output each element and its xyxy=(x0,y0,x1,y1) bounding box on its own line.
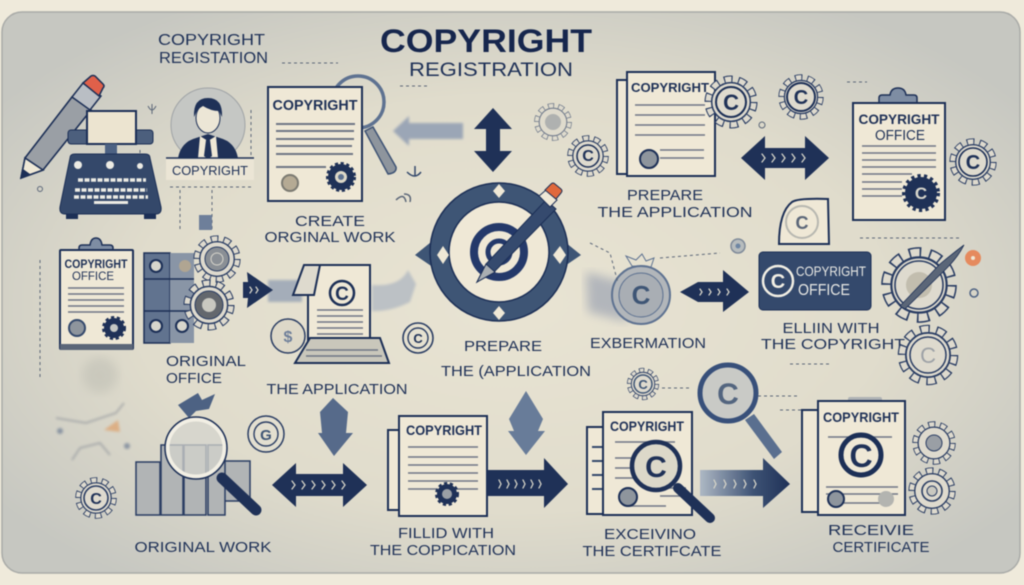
caption: filled with: FILLID WITH xyxy=(398,525,494,542)
clipboard: copyright office left: OFFICE xyxy=(72,269,114,283)
icon: gear with pen xyxy=(890,245,964,314)
caption: receive certificate: CERTIFICATE xyxy=(832,539,930,556)
caption: filled with: THE COPPICATION xyxy=(370,542,516,559)
icon: magnifier on certificate: C xyxy=(645,451,667,484)
arrow: gradient to certificate xyxy=(700,458,790,508)
arrow: double dark lower xyxy=(272,463,367,507)
caption: prepare the application xyxy=(598,187,752,221)
document: examining certificate: COPYRIGHT xyxy=(610,418,684,434)
icon: gear copyright 2: C xyxy=(794,87,808,109)
caption: filled with xyxy=(370,525,516,559)
caption: center prepare: THE (APPLICATION xyxy=(441,363,591,380)
icon: gear copyright 1: C xyxy=(723,90,739,115)
top-left heading xyxy=(158,32,268,67)
icon: application scroll xyxy=(293,265,389,363)
sign: copyright office: COPYRIGHT xyxy=(796,263,866,279)
caption: center prepare xyxy=(441,338,591,380)
arrow: double dark xyxy=(741,136,829,180)
sign: copyright office xyxy=(759,252,871,310)
icon: pale gear xyxy=(538,107,568,137)
icon: coin: $ xyxy=(284,329,293,346)
document: filled with application: COPYRIGHT xyxy=(406,422,482,438)
document: create original work: COPYRIGHT xyxy=(272,97,358,114)
caption: prepare the application: PREPARE xyxy=(627,187,703,204)
icon: small c ring: C xyxy=(413,331,423,346)
icon: orange dot xyxy=(965,250,981,266)
icon: gear lower right xyxy=(905,332,951,378)
arrow: dark to doc xyxy=(487,458,568,508)
title xyxy=(380,23,593,81)
caption: create original work: ORGINAL WORK xyxy=(264,229,396,246)
caption: create original work xyxy=(264,213,396,246)
central emblem xyxy=(415,183,581,321)
icon: large magnifier: C xyxy=(717,378,739,411)
clipboard: copyright office: COPYRIGHT xyxy=(858,111,940,127)
document: received certificate xyxy=(802,397,905,515)
arrow: vertical double dark xyxy=(474,108,512,172)
document: prepare the application: COPYRIGHT xyxy=(631,80,709,95)
caption: receive certificate: RECEIVIE xyxy=(828,522,914,539)
arrow: vertical center xyxy=(508,391,545,455)
icon: coin xyxy=(271,319,305,353)
clipboard: copyright office xyxy=(853,88,945,220)
icon: note above office sign: C xyxy=(796,213,808,233)
arrow: to scroll xyxy=(243,272,273,308)
connector lines xyxy=(662,388,810,410)
icon: gear lower right: C xyxy=(920,343,936,368)
caption: original office xyxy=(166,353,246,387)
icon: typewriter xyxy=(60,111,161,219)
clipboard: copyright office left: COPYRIGHT xyxy=(64,257,128,271)
document: received certificate: C xyxy=(849,438,873,474)
caption: examining certificate: THE CERTIFCATE xyxy=(582,543,722,560)
smudge: examination backdrop xyxy=(586,272,628,322)
sign: copyright office: OFFICE xyxy=(798,282,850,299)
caption: original office: ORIGINAL xyxy=(166,353,246,370)
arrow: pale left xyxy=(393,116,463,146)
caption: examination: EXBERMATION xyxy=(590,335,706,352)
icon: gear copyright 3 xyxy=(955,144,991,180)
icon: large magnifier xyxy=(700,365,782,459)
icon: examination seal xyxy=(590,243,720,324)
icon: copyright gear xyxy=(572,140,604,172)
icon: gear copyright 2 xyxy=(784,80,818,114)
icon: swirl copyright: G xyxy=(260,427,272,444)
clipboard: copyright office: OFFICE xyxy=(875,127,925,144)
top-left heading: COPYRIGHT xyxy=(158,32,265,49)
caption: filling with the copyright xyxy=(761,320,905,353)
title: COPYRIGHT xyxy=(380,23,593,59)
label: portrait copyright xyxy=(166,158,254,180)
caption: receive certificate xyxy=(828,522,930,556)
label: portrait copyright: COPYRIGHT xyxy=(172,163,248,178)
icon: small c badge: C xyxy=(638,377,648,392)
title: REGISTRATION xyxy=(409,60,573,81)
icon: magnifier behind document xyxy=(332,76,396,174)
icon: gear upper xyxy=(917,426,951,460)
icon: magnifier on certificate xyxy=(632,442,710,518)
icon: filing binders xyxy=(144,253,194,343)
icon: magnifier over columns xyxy=(136,417,256,515)
icon: seal copyright xyxy=(80,482,112,514)
caption: the application: THE APPLICATION xyxy=(266,381,408,398)
arrow: examination xyxy=(680,270,749,312)
arrow: pale right xyxy=(372,270,416,311)
icon: gear upper left xyxy=(199,241,235,277)
caption: filling with the copyright: THE COPYRIGHT xyxy=(761,336,905,353)
caption: examining certificate: EXCEIVINO xyxy=(604,526,696,543)
document: prepare the application xyxy=(617,72,715,176)
icon: small c badge xyxy=(631,372,655,396)
icon: small c ring xyxy=(403,323,433,353)
caption: examining certificate xyxy=(582,526,722,560)
caption: original office: OFFICE xyxy=(166,370,222,387)
document: examining certificate xyxy=(587,412,692,515)
icon: examination seal: C xyxy=(632,280,651,310)
icon: note above office sign xyxy=(779,199,829,244)
caption: original work: ORIGINAL WORK xyxy=(134,539,272,556)
clipboard: copyright office left xyxy=(60,238,133,350)
icon: small target xyxy=(731,239,745,253)
icon: gear lower xyxy=(914,473,950,509)
smudge: faded doodles xyxy=(56,357,130,460)
icon: gear copyright 3: C xyxy=(966,152,980,174)
caption: prepare the application: THE APPLICATION xyxy=(598,204,752,221)
icon: application scroll: C xyxy=(335,284,349,305)
icon: swirl copyright xyxy=(248,416,284,452)
sign: copyright office: C xyxy=(771,271,785,293)
arrow tail: faded xyxy=(268,280,302,302)
document: create original work xyxy=(268,87,362,201)
caption: filling with the copyright: ELLIIN WITH xyxy=(782,320,880,337)
document: received certificate: COPYRIGHT xyxy=(823,409,899,425)
small doodle marks xyxy=(38,63,978,380)
caption: center prepare: PREPARE xyxy=(464,338,542,355)
icon: fish doodle xyxy=(178,393,215,418)
document: filled with application xyxy=(388,416,487,516)
caption: create original work: CREATE xyxy=(295,213,365,230)
icon: gear copyright 1 xyxy=(711,82,751,122)
icon: pencil xyxy=(21,76,104,178)
arrow: vertical left xyxy=(318,398,353,456)
icon: seal copyright: C xyxy=(90,491,102,508)
icon: author portrait xyxy=(171,88,245,162)
icon: gear lower left xyxy=(189,285,229,325)
clipboard: copyright office: C xyxy=(915,184,927,203)
icon: copyright gear: C xyxy=(582,148,594,165)
top-left heading: REGISTATION xyxy=(159,50,268,67)
